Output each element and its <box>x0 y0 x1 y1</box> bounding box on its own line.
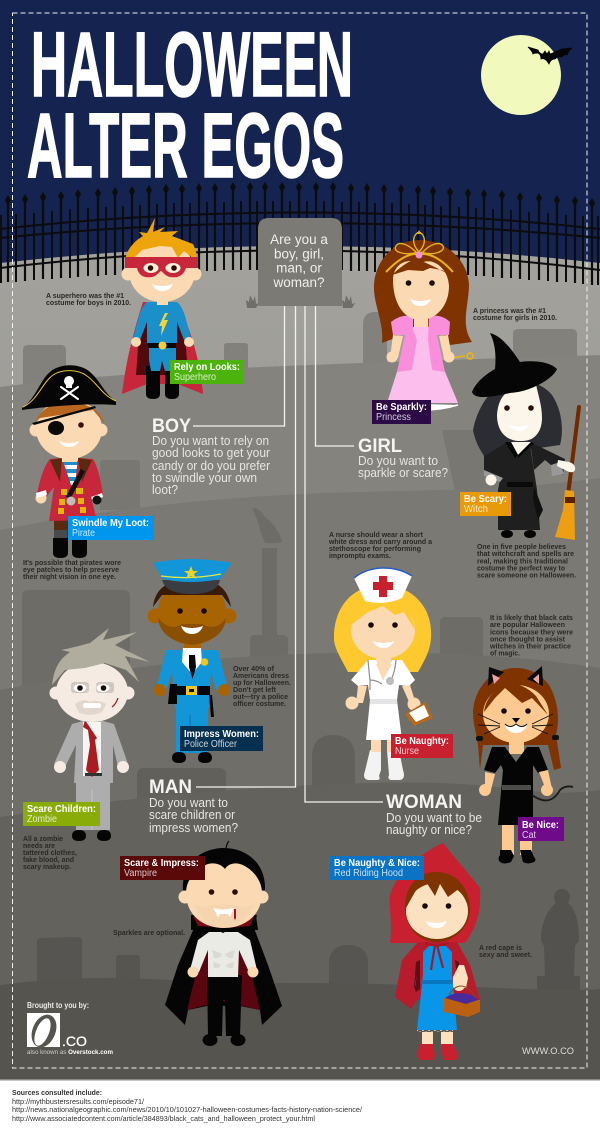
fact: pirate: eye patches to help preserve <box>23 565 119 574</box>
fact: pirate <box>23 558 121 581</box>
section: man: scare children or <box>149 807 236 822</box>
sources <box>12 1088 363 1123</box>
website: WWW.O.CO <box>522 1046 574 1057</box>
fact: zombie <box>23 834 77 871</box>
label: swindle my loot <box>68 516 154 540</box>
label: scare and impress: Scare & Impress: <box>124 858 199 869</box>
character: witch <box>472 333 579 540</box>
sources: http://news.nationalgeographic.com/news/2010/10/101027-halloween-costumes-facts-history-nation-science/ <box>12 1105 363 1114</box>
character: superhero <box>122 218 203 399</box>
character: cat <box>473 666 573 864</box>
character: zombie <box>50 628 150 841</box>
section: girl <box>358 436 448 480</box>
vulture statue <box>252 508 282 543</box>
fact: police <box>233 664 291 708</box>
logo: O mark <box>27 1011 61 1051</box>
question text: Are you a <box>270 232 328 247</box>
panel: tombstone question <box>246 218 355 308</box>
label: scare children: Zombie <box>27 814 57 825</box>
connector lines <box>193 306 383 802</box>
night sky <box>0 0 600 300</box>
section: man: MAN <box>149 777 192 798</box>
fact: police: out—try a police <box>233 692 288 701</box>
label: be naughty and nice: Be Naughty & Nice: <box>334 858 420 869</box>
fact: zombie: fake blood, and <box>23 855 74 864</box>
section: woman: Do you want to be <box>386 810 482 825</box>
fact: nurse: white dress and carry around a <box>328 537 433 546</box>
fact: red riding hood <box>479 943 532 959</box>
fact: police: Over 40% of <box>233 664 274 673</box>
section: man <box>149 777 238 835</box>
label: scare children: Scare Children: <box>27 804 96 815</box>
label: be scary: Be Scary: <box>464 494 507 505</box>
label: be naughty: Nurse <box>395 746 419 757</box>
broom <box>555 407 579 540</box>
fact: pirate: It's possible that pirates wore <box>23 558 121 567</box>
brand block: Brought to you by: <box>27 1001 89 1010</box>
fact: cat <box>489 613 573 658</box>
fact: cat: of magic. <box>490 648 520 658</box>
boy question: Do you want to rely on <box>152 433 269 448</box>
label: be sparkly <box>372 400 431 424</box>
fact: superhero: A superhero was the #1 <box>46 291 125 300</box>
character: pirate <box>22 365 116 558</box>
label: scare and impress <box>120 856 205 880</box>
label: scare and impress: Vampire <box>124 868 157 879</box>
character: nurse <box>334 568 433 780</box>
label: swindle my loot: Pirate <box>72 528 95 539</box>
label: impress women: Police Officer <box>184 739 238 750</box>
label: be nice: Be Nice: <box>522 820 559 831</box>
fact: cat: are popular Halloween <box>490 620 565 629</box>
section: girl: Do you want to <box>358 453 438 468</box>
graveyard ground layers <box>0 246 600 1080</box>
fact: police: up for Halloween. <box>233 678 291 687</box>
title <box>27 14 353 197</box>
label: rely on looks: Rely on Looks: <box>174 362 240 373</box>
character: red riding hood <box>390 843 480 1060</box>
label: be scary: Witch <box>464 504 488 515</box>
label: scare children <box>23 802 100 826</box>
fact: superhero: costume for boys in 2010. <box>46 298 131 307</box>
fact: zombie: needs are <box>23 841 55 850</box>
label: be naughty and nice <box>330 856 424 880</box>
fact: cat: It is likely that black cats <box>490 613 573 622</box>
character: princess <box>374 230 473 410</box>
question text: man, or <box>276 260 322 276</box>
fact: police: officer costume. <box>233 699 286 708</box>
character: vampire <box>165 841 282 1046</box>
question text <box>270 232 328 290</box>
question text: woman? <box>272 275 325 290</box>
section: girl: GIRL <box>358 436 402 457</box>
fact: cat: once thought to assist <box>490 634 565 644</box>
section: woman: WOMAN <box>386 792 462 813</box>
boy question: good looks to get your <box>152 445 271 460</box>
fact: witch: costume the perfect way to <box>477 564 565 572</box>
label: rely on looks: Superhero <box>174 372 216 383</box>
brand block: also known as Overstock.com <box>27 1049 113 1056</box>
sources: http://mythbustersresults.com/episode71/ <box>12 1097 145 1106</box>
label: impress women <box>180 726 263 751</box>
fact: witch: real, making this traditional <box>477 556 568 566</box>
boy question: to swindle your own <box>152 470 257 485</box>
fact: witch: One in five people believes <box>477 542 566 551</box>
fact: nurse: A nurse should wear a short <box>329 530 423 539</box>
fact: witch: that witchcraft and spells are <box>477 549 574 558</box>
fact: princess: costume for girls in 2010. <box>473 313 557 322</box>
fact: superhero <box>46 291 131 307</box>
fact: vampire: Sparkles are optional. <box>113 928 185 937</box>
fact: princess <box>473 306 557 322</box>
fact: cat: witches in their practice <box>489 642 571 650</box>
section: boy <box>152 416 271 497</box>
fact: red riding hood: A red cape is <box>479 943 522 952</box>
fact: zombie: All a zombie <box>23 834 63 843</box>
label: swindle my loot: Swindle My Loot: <box>72 518 149 529</box>
brand block: .CO <box>62 1033 87 1049</box>
fact: nurse: stethoscope for performing <box>329 544 421 553</box>
label: be scary <box>460 492 511 516</box>
fact: witch <box>477 542 576 580</box>
label: impress women: Impress Women: <box>184 729 259 740</box>
icon: bat <box>528 47 572 64</box>
label: be naughty: Be Naughty: <box>395 736 449 747</box>
sources: http://www.associatedcontent.com/article/384893/black_cats_and_halloween_protect_your.html <box>12 1114 315 1123</box>
boy question: candy or do you prefer <box>152 458 271 473</box>
fact: police: Don't get left <box>233 685 276 694</box>
section: boy: BOY <box>152 416 191 437</box>
label: be nice: Cat <box>522 830 536 841</box>
label: be sparkly: Be Sparkly: <box>376 402 427 413</box>
moon <box>481 35 561 115</box>
fact: cat: icons because they were <box>490 628 573 636</box>
sources: Sources consulted include: <box>12 1088 102 1097</box>
fact: police: Americans dress <box>233 671 289 680</box>
boy question: loot? <box>152 482 178 497</box>
section: woman: naughty or nice? <box>386 822 472 837</box>
fact: zombie: tattered clothes, <box>23 848 77 857</box>
section: man: impress women? <box>149 820 238 835</box>
label: be naughty and nice: Red Riding Hood <box>334 868 403 879</box>
section: girl: sparkle or scare? <box>358 465 448 480</box>
brand block <box>27 1001 113 1056</box>
label: rely on looks <box>170 360 244 384</box>
fact: witch: scare someone on Halloween. <box>477 570 576 580</box>
icon: grass tufts <box>246 295 355 308</box>
fact: zombie: scary makeup. <box>23 862 71 871</box>
label: be naughty <box>391 734 453 758</box>
iron fence <box>0 182 600 285</box>
fact: nurse <box>328 530 433 560</box>
question text: boy, girl, <box>274 246 324 262</box>
fact: princess: A princess was the #1 <box>473 306 547 315</box>
fact: red riding hood: sexy and sweet. <box>479 950 532 959</box>
label: be nice <box>518 817 564 841</box>
section: woman <box>386 792 482 837</box>
fact: nurse: impromptu exams. <box>329 551 391 560</box>
boy question <box>152 433 271 497</box>
label: be sparkly: Princess <box>376 412 411 423</box>
character: police officer <box>148 559 236 763</box>
fact: pirate: their night vision in one eye. <box>23 572 116 581</box>
section: man: Do you want to <box>149 795 228 810</box>
